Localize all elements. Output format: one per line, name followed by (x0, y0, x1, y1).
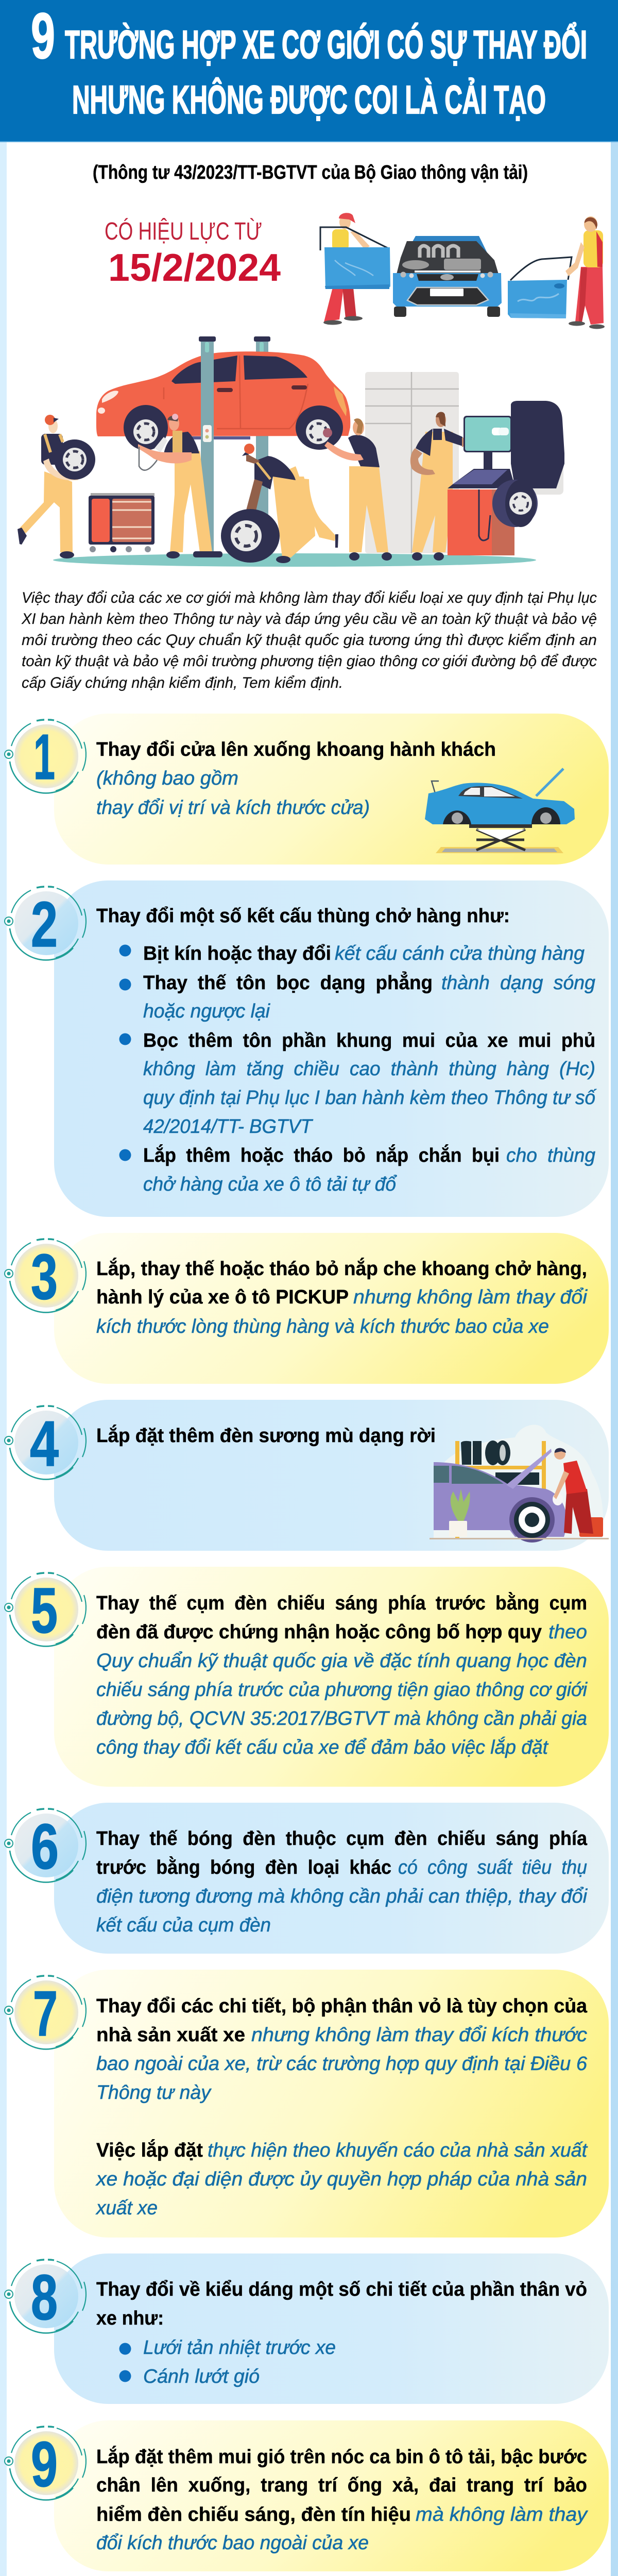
tool cabinet (89, 493, 154, 552)
item 9 text (96, 2445, 588, 2554)
item 9 text: hiểm đèn chiếu sáng, đèn tín hiệu (96, 2504, 411, 2526)
worker bending over tyre (221, 444, 338, 563)
intro paragraph: cấp Giấy chứng nhận kiểm định, Tem kiểm định. (22, 674, 343, 691)
panel: item 3 (5, 1233, 609, 1384)
wall panels (365, 372, 459, 553)
item 8 heading (96, 2279, 587, 2329)
item 6 text: Thay thế bóng đèn thuộc cụm đèn chiếu sáng phía (96, 1828, 588, 1850)
rear lift pillar (254, 336, 270, 553)
item 1 heading: Thay đổi cửa lên xuống khoang hành khách (96, 739, 496, 760)
item 8 heading: Thay đổi về kiểu dáng một số chi tiết của phần thân vỏ (96, 2279, 587, 2300)
badge 8: 8 (31, 2262, 58, 2333)
item 4 text: Lắp đặt thêm đèn sương mù dạng rời (96, 1424, 436, 1447)
worker at the machine (410, 412, 493, 561)
badge 5 (5, 1573, 86, 1647)
item 6 text: có công suất tiêu thụ (398, 1857, 587, 1878)
bullet: cladding: hoặc ngược lại (143, 1001, 271, 1022)
item 9 text: chân lên xuống, trang trí ống xả, đai trang trí bảo (96, 2475, 587, 2496)
subtitle: (Thông tư 43/2023/TT-BGTVT của Bộ Giao thông vận tải) (93, 162, 528, 183)
item 7 text: nhưng không làm thay đổi kích thước (251, 2024, 587, 2046)
title banner (0, 0, 618, 142)
item 8 heading: xe như: (96, 2308, 164, 2329)
badge 7 (5, 1976, 86, 2049)
panel: item 2 (5, 880, 609, 1217)
panel: item 6 (5, 1803, 609, 1954)
left worker (323, 213, 370, 325)
intro paragraph: Việc thay đổi của các xe cơ giới mà không làm thay đổi kiểu loại xe quy định tại Phụ lục (22, 589, 597, 606)
bullet: door structure (119, 943, 585, 964)
panel: item 1 (5, 714, 609, 865)
item 7 installation note: xe hoặc đại diện được ủy quyền hợp pháp của nhà sản (95, 2168, 587, 2190)
item 5 text: chiếu sáng phía trước của phương tiện giao thông cơ giới (96, 1679, 588, 1701)
badge 4: 4 (30, 1409, 59, 1480)
item 5 text: công thay đổi kết cấu của xe để đảm bảo việc lắp đặt (96, 1736, 548, 1758)
item 9 text: đổi kích thước bao ngoài của xe (96, 2532, 369, 2554)
badge 2: 2 (31, 889, 58, 960)
front of car (393, 236, 502, 317)
item 2 heading: Thay đổi một số kết cấu thùng chở hàng như: (96, 905, 510, 927)
effective date value: 15/2/2024 (108, 246, 281, 289)
bullet: radiator grille: Lưới tản nhiệt trước xe (143, 2337, 336, 2359)
item 6 text (96, 1828, 588, 1936)
badge 3 (5, 1239, 86, 1313)
item 3 text: nhưng không làm thay đổi (353, 1286, 588, 1308)
effective date (105, 217, 281, 289)
badge 2 (5, 887, 86, 960)
badge 7: 7 (33, 1978, 58, 2049)
worker with stethoscope (138, 414, 222, 558)
wheel balancing machine (448, 401, 564, 555)
intro paragraph: toàn kỹ thuật và bảo vệ môi trường phương tiện giao thông cơ giới đường bộ để được (22, 653, 597, 670)
item 5 text (96, 1591, 588, 1758)
item 3 text: Lắp, thay thế hoặc tháo bỏ nắp che khoang chở hàng, (96, 1257, 587, 1280)
right worker (565, 216, 605, 329)
item 6 text: trước bằng bóng đèn loại khác (96, 1856, 391, 1878)
panel: item 7 (5, 1970, 609, 2238)
item 7 text (96, 1995, 588, 2104)
item 7 text: Thông tư này (96, 2082, 212, 2104)
item 3 text: kích thước lòng thùng hàng và kích thước bao của xe (96, 1316, 549, 1337)
bullet: tarp frame (119, 1030, 597, 1138)
bullet: door structure: Bịt kín hoặc thay đổi (143, 943, 331, 964)
item 6 text: kết cấu của cụm đèn (96, 1914, 271, 1936)
item 5 text: Quy chuẩn kỹ thuật quốc gia về đặc tính quang học đèn (96, 1650, 587, 1672)
panel: item 9 (5, 2420, 609, 2571)
item 6 text: điện tương đương mà không cần phải can thiệp, thay đổi (96, 1886, 588, 1907)
item 5 text: đường bộ, QCVN 35:2017/BGTVT mà không cần phải gia (96, 1708, 587, 1730)
bullet: dust cover: chở hàng của xe ô tô tải tự đổ (143, 1174, 397, 1195)
worker holding tyre (18, 415, 95, 558)
bullet: spoiler: Cánh lướt gió (143, 2366, 260, 2387)
bullet: cladding: thành dạng sóng (441, 972, 595, 994)
bullet: tarp frame: quy định tại Phụ lục I ban hành kèm theo Thông tư số (143, 1087, 597, 1109)
badge 1: 1 (33, 722, 55, 793)
item 7 text: Thay đổi các chi tiết, bộ phận thân vỏ là tùy chọn của (96, 1995, 588, 2017)
intro paragraph: XI ban hành kèm theo Thông tư này và đáp ứng yêu cầu về an toàn kỹ thuật và bảo vệ (21, 611, 597, 628)
illustration: workers fitting doors on a blue car (320, 213, 605, 329)
item 5 text: đèn đã được chứng nhận hoặc công bố hợp quy (96, 1621, 542, 1643)
badge 6: 6 (31, 1811, 59, 1883)
bullet: tarp frame: 42/2014/TT- BGTVT (143, 1116, 314, 1138)
orange car (96, 351, 350, 450)
item 5 text: Thay thế cụm đèn chiếu sáng phía trước bằng cụm (96, 1591, 587, 1614)
item 7 installation note: xuất xe (95, 2197, 158, 2219)
item 3 text (96, 1257, 588, 1337)
badge 9 (5, 2427, 86, 2500)
bullet: tarp frame: Bọc thêm tôn phần khung mui của xe mui phủ (143, 1030, 595, 1052)
bullet: cladding (119, 971, 595, 1022)
intro paragraph: môi trường theo các Quy chuẩn kỹ thuật quốc gia tương ứng thì được kiểm định an (22, 632, 597, 649)
panel: item 8 (5, 2253, 609, 2404)
bullet: door structure: kết cấu cánh cửa thùng hàng (335, 943, 585, 964)
badge 5: 5 (31, 1575, 58, 1647)
item 9 text: mà không làm thay (416, 2504, 588, 2526)
item 1 note (96, 768, 370, 819)
panel: item 4 (5, 1400, 609, 1551)
front lift pillar (199, 336, 216, 553)
item 7 installation note (95, 2139, 588, 2219)
item 5 text: theo (548, 1621, 587, 1643)
item 9 text: Lắp đặt thêm mui gió trên nóc ca bin ô tô tải, bậc bước (96, 2445, 587, 2468)
item 3 text: hành lý của xe ô tô PICKUP (96, 1286, 349, 1308)
badge 9: 9 (31, 2429, 58, 2500)
item 1 note: (không bao gồm (96, 768, 238, 789)
illustration: garage with orange car on a lift (18, 336, 564, 567)
badge 8 (5, 2260, 86, 2333)
item 7 text: bao ngoài của xe, trừ các trường hợp quy định tại Điều 6 (96, 2053, 588, 2075)
badge 1 (5, 720, 86, 793)
badge 3: 3 (31, 1242, 58, 1313)
panel: item 5 (5, 1567, 609, 1787)
item 7 text: nhà sản xuất xe (96, 2024, 245, 2046)
bullet: tarp frame: không làm tăng chiều cao thành thùng hàng (Hc) (143, 1058, 595, 1080)
badge 6 (5, 1809, 86, 1883)
right door (508, 257, 572, 318)
badge 4 (5, 1406, 86, 1480)
intro paragraph (21, 589, 597, 691)
item 1 note: thay đổi vị trí và kích thước cửa) (96, 797, 370, 819)
effective date label: CÓ HIỆU LỰC TỪ (105, 217, 262, 245)
floor (53, 553, 536, 567)
icon: blue car on scissor lift (425, 769, 575, 853)
bullet: dust cover: cho thùng (506, 1145, 595, 1166)
bullet: dust cover (119, 1144, 595, 1195)
worker at the wheel (323, 418, 392, 561)
icon: mechanic working under a purple car's hood (430, 1425, 609, 1543)
title numeral: 9 (31, 1, 55, 72)
item 7 installation note: Việc lắp đặt (96, 2139, 203, 2161)
left door (320, 227, 390, 289)
bullet: cladding: Thay thế tôn bọc dạng phẳng (143, 971, 433, 994)
item 7 installation note: thực hiện theo khuyến cáo của nhà sản xuất (208, 2140, 588, 2161)
bullet: dust cover: Lắp thêm hoặc tháo bỏ nắp chắn bụi (143, 1144, 500, 1166)
